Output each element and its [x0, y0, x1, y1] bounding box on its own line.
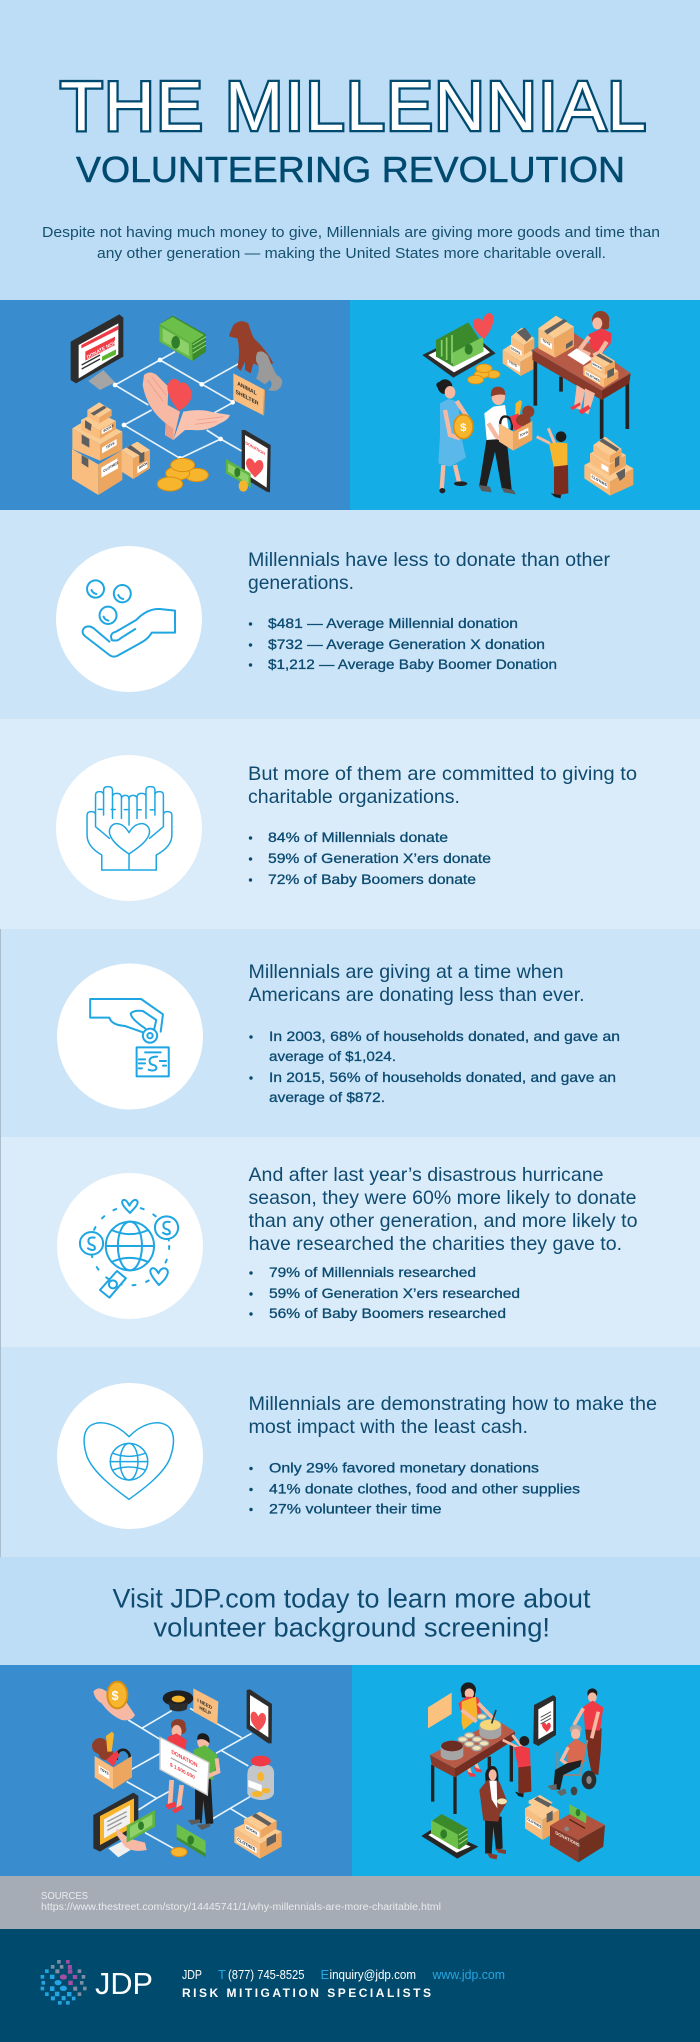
text block: section 4 heading: season, they were 60% more likely to donate [248, 1187, 636, 1209]
intro text: any other generation — making the United States more charitable overall. [97, 246, 606, 262]
list: section 2 [249, 829, 491, 887]
list: section 1: $481 — Average Millennial donation [268, 615, 518, 631]
text block: section 4 heading: And after last year’s disastrous hurricane [248, 1164, 604, 1186]
list: section 1 [249, 615, 557, 672]
subtitle: VOLUNTEERING REVOLUTION: VOLUNTEERING REVOLUTION [76, 149, 625, 190]
boxes left of table: SOCKS [511, 346, 520, 355]
icon: open hands with heart [56, 755, 202, 901]
seated volunteer woman [567, 311, 612, 414]
hand holding coin: $ [111, 1689, 119, 1703]
animal shelter sign: ANIMAL [237, 381, 257, 398]
stacked cardboard boxes: SOCKS [103, 423, 114, 433]
man carrying donation box [478, 387, 534, 494]
intro text [42, 225, 660, 262]
intro text: Despite not having much money to give, Millennials are giving more goods and time than [42, 225, 660, 241]
call to action text: volunteer background screening! [154, 1612, 550, 1642]
tablet with heart [247, 1689, 272, 1743]
clothes and socks boxes [234, 1812, 282, 1859]
text block: section 4 heading: than any other generation, and more likely to [248, 1210, 638, 1232]
boxes [525, 1795, 559, 1840]
box on the table: CLOTHES [586, 371, 600, 384]
text block: section 1 heading [248, 549, 611, 594]
text block: section 1 heading: generations. [248, 572, 354, 594]
panel: section 2 [0, 719, 700, 929]
donation table [532, 330, 631, 439]
woman in blue dress holding coin [436, 379, 473, 493]
stacked boxes bottom right [584, 437, 633, 496]
boxes left of table: TOYS [509, 360, 517, 369]
icon: globe with donations [57, 1173, 203, 1319]
list: section 3 [249, 1028, 620, 1105]
panel: section 3 [0, 929, 700, 1137]
contact line: www.jdp.com [432, 1967, 505, 1982]
money stack [159, 316, 206, 361]
woman in blue dress holding coin: $ [460, 422, 467, 434]
hat with coins [163, 1690, 193, 1711]
contact line: T [218, 1967, 226, 1982]
text block: section 4 heading [248, 1164, 638, 1255]
monitor: donate now [71, 314, 123, 390]
sources text: https://www.thestreet.com/story/14445741/1/why-millennials-are-more-charitable.html [41, 1902, 441, 1913]
contact line: E [320, 1967, 330, 1982]
logo: JDP wordmark: JDP [95, 1966, 153, 2001]
list: section 1: $1,212 — Average Baby Boomer Donation [268, 656, 557, 672]
man pushing wheelchair [547, 1688, 603, 1796]
contact line: inquiry@jdp.com [330, 1967, 416, 1982]
text block: section 4 heading: have researched the charities they gave to. [248, 1233, 622, 1255]
title: THE MILLENNIAL: THE MILLENNIAL [60, 67, 646, 145]
coin jar [247, 1756, 274, 1800]
boxes: CLOTHES [527, 1817, 542, 1829]
panel: bottom left illustration, donation check [0, 1665, 352, 1876]
tagline: RISK MITIGATION SPECIALISTS [182, 1986, 431, 2000]
couple with donation check: DONATION [171, 1749, 197, 1769]
cooking table [430, 1720, 515, 1814]
text block: section 1 heading: Millennials have less to donate than other [248, 549, 611, 571]
stacked cardboard boxes: TOYS [106, 441, 115, 450]
phone with money [421, 1814, 478, 1859]
list: section 3: In 2015, 56% of households donated, and gave an [269, 1069, 616, 1085]
text block: section 2 heading: But more of them are committed to giving to [248, 763, 637, 785]
toy box: TOYS [100, 1767, 109, 1776]
pots and bowls [441, 1710, 501, 1760]
network lines [127, 1708, 252, 1849]
phone with donation heart and bill [226, 430, 271, 492]
text block: section 2 heading: charitable organizations. [248, 786, 460, 808]
list: section 4 [249, 1264, 520, 1321]
list: section 3: average of $1,024. [269, 1048, 396, 1064]
logo: JDP dot globe [41, 1960, 87, 2005]
monitor with hand and bill [93, 1793, 155, 1857]
panel: sources [0, 1876, 700, 1929]
standing woman with bowl [479, 1766, 507, 1859]
list: section 2: 59% of Generation X’ers donate [268, 850, 491, 866]
panel: section 4 [0, 1137, 700, 1347]
phone with donation heart and bill: DONATION [245, 440, 265, 456]
icon: hand dropping coin into box [57, 964, 203, 1110]
panel: section 5 [0, 1347, 700, 1557]
clothes and socks boxes: CLOTHES [237, 1837, 255, 1852]
animal shelter sign: SHELTER [236, 389, 258, 408]
contact line: (877) 745-8525 [228, 1967, 304, 1982]
phone with heart [533, 1695, 556, 1746]
text block: section 2 heading [248, 763, 637, 808]
I need help sign: I NEED [197, 1698, 212, 1712]
list: section 1: $732 — Average Generation X donation [268, 636, 545, 652]
panel: bottom right illustration, food drive [350, 1665, 700, 1876]
I need help sign [193, 1688, 218, 1725]
toy box [92, 1732, 132, 1789]
blank sign [428, 1693, 452, 1728]
bill and coin [171, 1824, 206, 1857]
list: section 4: 79% of Millennials researched [269, 1264, 476, 1280]
I need help sign: HELP [199, 1705, 212, 1718]
contact line [182, 1967, 505, 1982]
stacked cardboard boxes: BOOK [139, 461, 148, 470]
box on the table: TOYS [542, 338, 551, 347]
list: section 4: 56% of Baby Boomers researched [269, 1305, 506, 1321]
list: section 5 [249, 1460, 580, 1516]
stacked boxes bottom right: CLOTHES [592, 475, 607, 488]
animal shelter sign [233, 373, 265, 416]
text block: section 5 heading: Millennials are demonstrating how to make the [248, 1393, 657, 1415]
left edge hairline [0, 929, 1, 1665]
icon: hand and coins [56, 546, 202, 692]
network lines [113, 352, 242, 461]
text block: section 3 heading: Millennials are giving at a time when [248, 961, 564, 983]
stacked cardboard boxes [72, 402, 150, 495]
panel: header background [0, 0, 700, 300]
donations box: DONATIONS [555, 1830, 580, 1848]
list: section 4: 59% of Generation X’ers researched [269, 1285, 520, 1301]
clothes and socks boxes: SOCKS [246, 1825, 258, 1836]
contact line: JDP [182, 1967, 202, 1982]
hands holding heart [143, 372, 230, 440]
list: section 3: In 2003, 68% of households donated, and gave an [269, 1028, 620, 1044]
list: section 5: Only 29% favored monetary donations [269, 1460, 539, 1476]
panel: top left illustration, donation network [0, 300, 350, 510]
sources text [41, 1891, 441, 1913]
icon: heart with globe [57, 1383, 203, 1529]
box on the table: SOCKS [592, 361, 602, 371]
panel: section 1 [0, 510, 700, 719]
list: section 2: 72% of Baby Boomers donate [268, 871, 476, 887]
call to action text: Visit JDP.com today to learn more about [112, 1584, 591, 1614]
text block: section 3 heading: Americans are donating less than ever. [248, 984, 584, 1006]
text block: section 5 heading: most impact with the least cash. [248, 1416, 528, 1438]
call to action text [112, 1584, 591, 1642]
text block: section 3 heading [248, 961, 584, 1006]
woman cooking [458, 1682, 494, 1777]
boxes left of table [503, 328, 535, 376]
list: section 2: 84% of Millennials donate [268, 829, 448, 845]
panel: call to action [0, 1557, 700, 1665]
panel: footer [0, 1929, 700, 2042]
list: section 3: average of $872. [269, 1089, 385, 1105]
panel: top right illustration, volunteers [350, 300, 700, 510]
child reaching up [537, 428, 568, 498]
monitor: donate now: DONATE NOW [86, 339, 118, 361]
gold coins [157, 458, 208, 491]
tablet with money and heart [422, 313, 500, 384]
text block: section 5 heading [248, 1393, 657, 1438]
hand holding coin [93, 1682, 135, 1720]
list: section 5: 41% donate clothes, food and other supplies [269, 1480, 580, 1496]
donations box [550, 1804, 605, 1862]
list: section 5: 27% volunteer their time [269, 1500, 442, 1516]
couple with donation check [160, 1719, 218, 1830]
man carrying donation box: TOYS [520, 430, 528, 438]
child at table [503, 1735, 531, 1797]
couple with donation check: $ 1.000.000 [170, 1762, 195, 1781]
sources text: SOURCES [41, 1891, 88, 1902]
stacked cardboard boxes: CLOTHES [103, 460, 119, 473]
dog and cat [229, 321, 282, 391]
box on the table [538, 316, 618, 388]
